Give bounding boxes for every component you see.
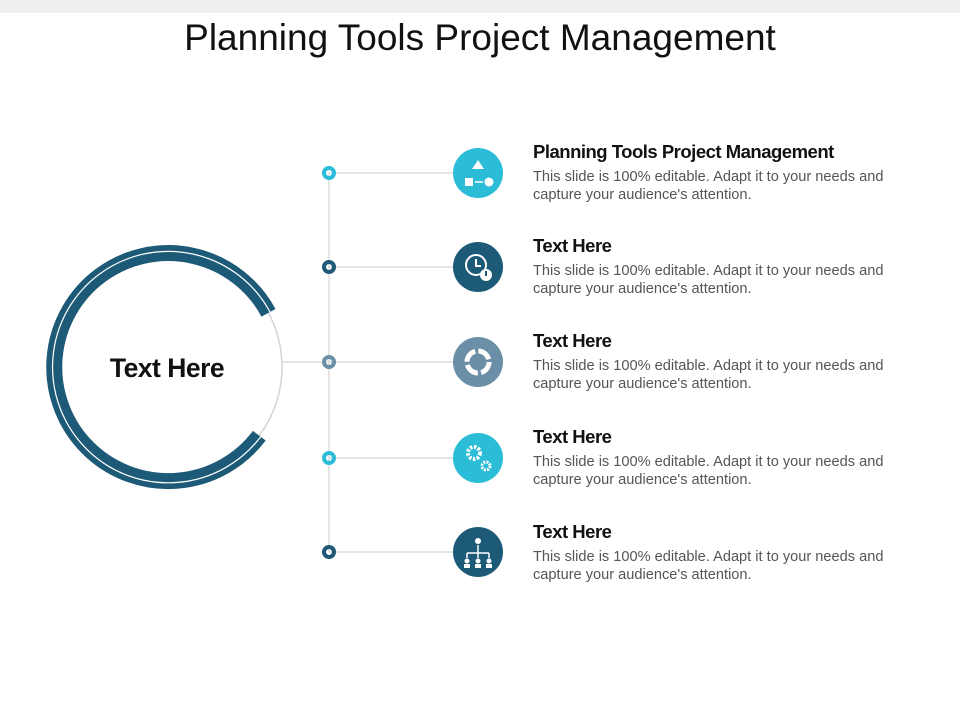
icon 4: gears [453,433,503,483]
text block 1: This slide is 100% editable. Adapt it to your needs and capture your audience's attention. [533,169,883,203]
main circle ring: Text Here [110,353,224,383]
text block 1 [533,141,883,203]
text block 5: This slide is 100% editable. Adapt it to your needs and capture your audience's attention. [533,549,883,583]
text block 4: Text Here [533,426,611,447]
text block 5 [533,521,883,583]
text block 4: This slide is 100% editable. Adapt it to your needs and capture your audience's attention. [533,454,883,488]
title: Planning Tools Project Management [184,17,776,58]
text block 2: Text Here [533,235,611,256]
text block 1: Planning Tools Project Management [533,141,834,162]
icon 3: cycle [453,337,503,387]
text block 3 [533,330,883,392]
text block 3: Text Here [533,330,611,351]
icon 1: flow shapes [453,148,503,198]
icon 2: clock [453,242,503,292]
text block 5: Text Here [533,521,611,542]
text block 3: This slide is 100% editable. Adapt it to your needs and capture your audience's attention. [533,358,883,392]
text block 2 [533,235,883,297]
top bar [0,0,960,13]
dots [324,168,334,557]
text block 2: This slide is 100% editable. Adapt it to your needs and capture your audience's attention. [533,263,883,297]
main circle ring [52,251,282,483]
text block 4 [533,426,883,488]
icon 5: org chart [453,527,503,577]
connector lines [282,173,460,552]
